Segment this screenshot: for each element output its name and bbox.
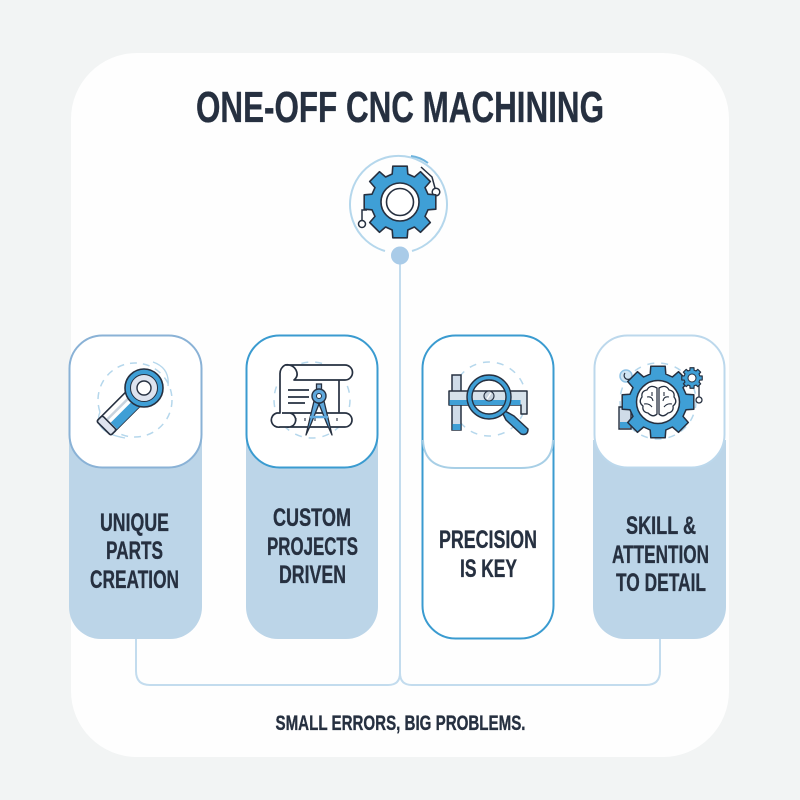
panel: precision is key [422,336,554,638]
footer caption: SMALL ERRORS, BIG PROBLEMS. [276,712,526,735]
card label [612,512,709,597]
icon: key magnifier [97,362,172,438]
panel: skill and attention to detail [593,336,726,639]
icon box edge [423,440,553,468]
icon: gear with brain [619,363,702,439]
card label: DRIVEN [279,561,346,589]
card label: PROJECTS [267,533,358,561]
panel: custom projects driven [246,336,378,639]
card body [246,440,378,639]
card body [593,440,726,639]
card label: UNIQUE [100,509,169,537]
card label [439,526,537,583]
card label: TO DETAIL [616,569,706,597]
icon: caliper and magnifier [449,362,528,436]
card outline [422,336,554,638]
card label: ATTENTION [612,541,709,569]
icon box [246,336,378,468]
card label [267,504,358,589]
card label: PARTS [106,537,163,565]
icon: blueprint and compass [271,362,353,438]
panel: unique parts creation [69,336,202,639]
connector lines [136,264,660,685]
card label: IS KEY [460,555,517,583]
card label: CREATION [90,566,179,594]
title: ONE-OFF CNC MACHINING [196,83,604,132]
card label: CUSTOM [273,504,351,532]
card label: SKILL & [626,512,696,540]
icon box [594,336,724,468]
card body [69,440,202,639]
card label [90,509,179,594]
card label: PRECISION [439,526,537,554]
icon: central gear [350,156,447,264]
panel: main white card [71,53,729,757]
icon box [70,336,202,468]
